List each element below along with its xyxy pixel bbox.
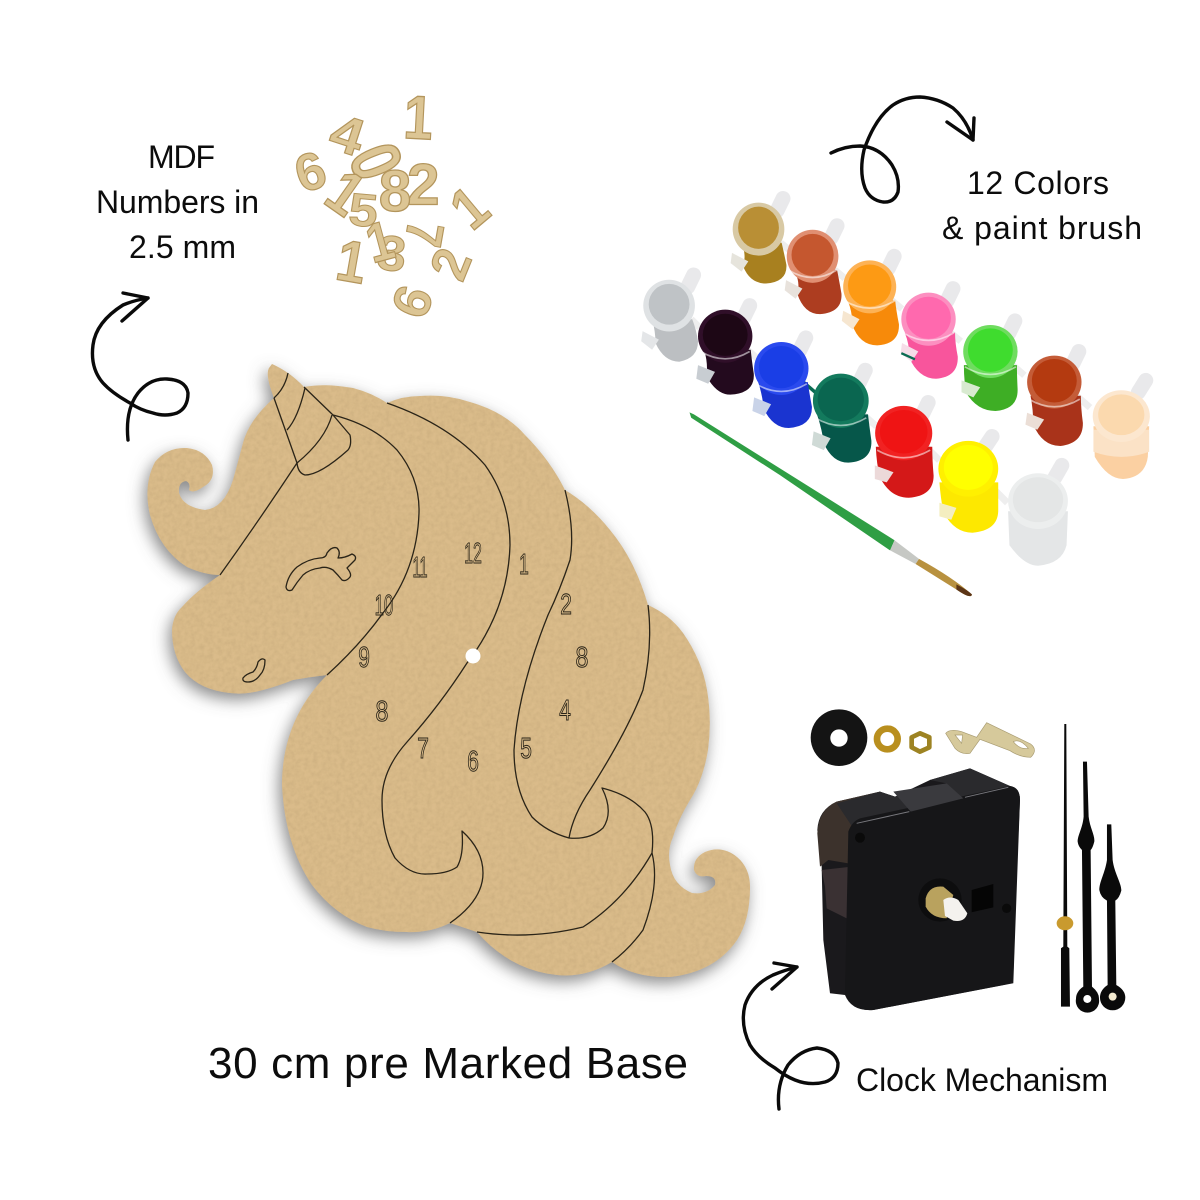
arrow: to clock mechanism — [743, 963, 838, 1109]
label: MDF numbers: 2.5 mm — [129, 229, 236, 265]
image: clock mechanism kit — [811, 709, 1125, 1013]
clock numbers: 7 — [417, 733, 429, 765]
bracket — [946, 723, 1034, 757]
pot: orange — [842, 256, 902, 345]
clock numbers: 9 — [358, 642, 370, 674]
label: clock mechanism: Clock Mechanism — [856, 1062, 1108, 1098]
hour hand — [1099, 824, 1125, 1010]
image: scattered MDF numbers: 0 — [333, 133, 418, 191]
pot: terracotta — [785, 226, 845, 314]
nostril — [243, 659, 265, 682]
base shape — [147, 364, 750, 977]
clock numbers: 1 — [519, 549, 529, 581]
pot: red-brown — [1025, 352, 1090, 446]
clock numbers: 11 — [412, 550, 428, 583]
pot: dark purple — [696, 306, 759, 395]
unicorn clock base — [147, 364, 750, 977]
brass shaft — [926, 886, 953, 918]
image: scattered MDF numbers: 8 — [379, 159, 411, 224]
image: scattered MDF numbers: 1 — [439, 175, 501, 242]
image: paint pots — [641, 198, 1150, 596]
image: scattered MDF numbers: 1 — [402, 83, 435, 154]
pot: red — [875, 402, 939, 498]
image: scattered MDF numbers: 4 — [323, 102, 372, 168]
label: 30 cm pre marked base: 30 cm pre Marked Base — [208, 1039, 688, 1088]
pot: green — [962, 321, 1024, 411]
pot: blue — [752, 338, 815, 428]
image: scattered MDF numbers: 6 — [381, 278, 446, 326]
pot: gold — [731, 198, 791, 284]
clock numbers: 12 — [464, 537, 482, 569]
arrow: to paint set — [831, 97, 974, 202]
clock numbers: 6 — [467, 746, 479, 778]
image: scattered MDF numbers — [288, 83, 501, 326]
minute hand — [1076, 762, 1099, 1013]
label: 12 colors and paint brush — [942, 165, 1142, 246]
clock numbers: 4 — [559, 695, 571, 727]
washer — [811, 709, 867, 766]
clock numbers: 8 — [376, 694, 388, 728]
clock numbers: 10 — [375, 591, 393, 622]
paint brush — [690, 412, 972, 596]
label: MDF numbers: MDF — [148, 139, 215, 175]
pot: peach — [1093, 380, 1150, 479]
clock numbers: 2 — [560, 589, 572, 621]
pot: yellow — [938, 436, 1007, 533]
hour hand hole — [1109, 993, 1117, 1001]
movement body — [817, 768, 1020, 1010]
clock numbers — [358, 537, 588, 778]
pot: white — [1008, 465, 1068, 566]
engraved lines — [220, 373, 655, 962]
pot: teal — [812, 370, 876, 463]
image: scattered MDF numbers: 5 — [347, 184, 380, 238]
image: scattered MDF numbers: 6 — [288, 141, 333, 205]
image: scattered MDF numbers: 3 — [375, 225, 409, 282]
label: MDF numbers — [96, 139, 259, 265]
eye — [286, 548, 356, 591]
image: scattered MDF numbers: 1 — [360, 208, 400, 275]
pot: silver glitter — [641, 275, 700, 362]
image: scattered MDF numbers: 2 — [407, 152, 440, 217]
image: scattered MDF numbers: 2 — [418, 240, 483, 288]
clock numbers: 8 — [576, 640, 588, 674]
label: 12 colors and paint brush: 12 Colors — [967, 165, 1109, 201]
label: MDF numbers: Numbers in — [96, 184, 259, 220]
image: scattered MDF numbers: 7 — [393, 217, 454, 251]
image: scattered MDF numbers: 1 — [332, 227, 372, 296]
pot: pink — [901, 289, 961, 379]
brass ring — [877, 729, 898, 749]
image: scattered MDF numbers: 1 — [313, 157, 377, 230]
second hand — [1057, 724, 1073, 1007]
center hole — [466, 648, 480, 664]
label: 12 colors and paint brush: & paint brush — [942, 210, 1142, 246]
clock numbers: 5 — [520, 733, 532, 765]
hex nut — [912, 733, 929, 752]
arrow: to MDF numbers — [92, 293, 188, 440]
